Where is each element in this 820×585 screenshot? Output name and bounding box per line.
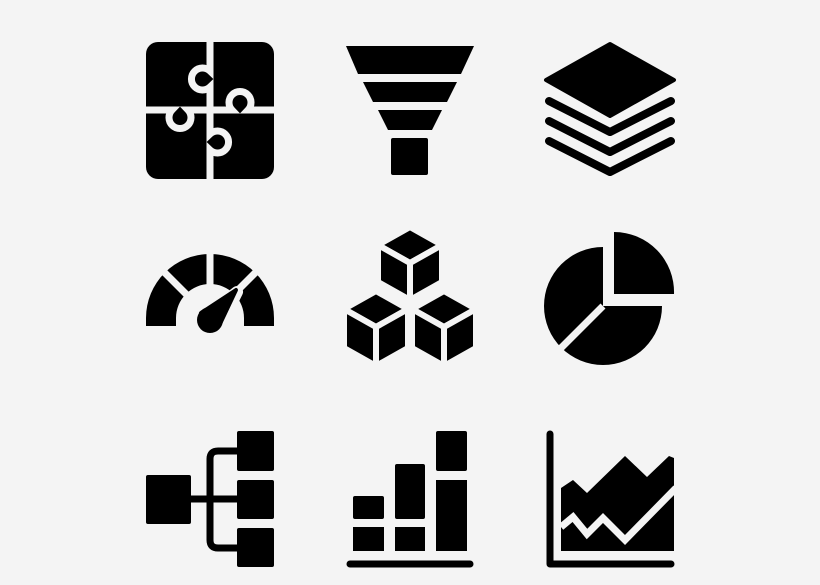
icon: layers — [546, 44, 674, 172]
icon: bar chart — [350, 431, 470, 564]
icon: puzzle — [144, 40, 276, 181]
icon: cubes — [344, 227, 476, 366]
icon: pie chart — [544, 232, 674, 365]
icon: area chart — [550, 434, 676, 564]
icon: funnel — [346, 46, 474, 175]
icon: gauge — [146, 250, 274, 338]
icon: hierarchy — [146, 431, 274, 567]
